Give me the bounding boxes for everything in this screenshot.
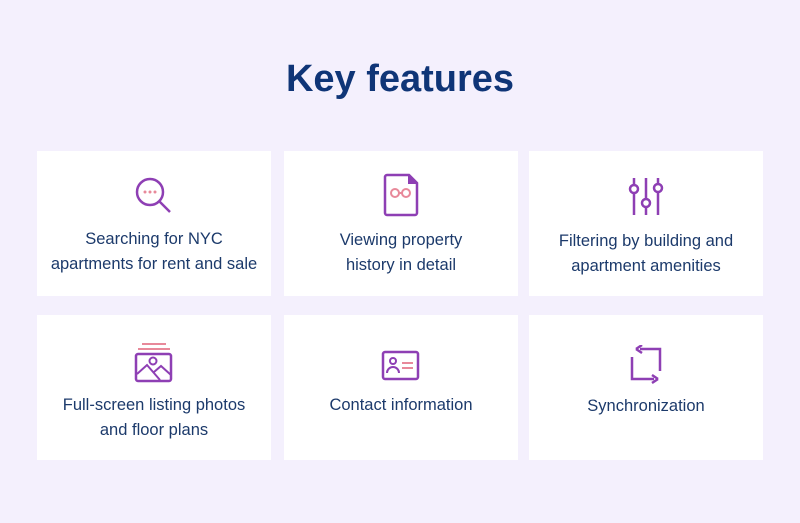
text <box>51 230 257 273</box>
icon: image stack <box>134 343 172 382</box>
title: Key features <box>286 58 514 100</box>
text: history in detail <box>346 256 456 274</box>
icon: magnifier <box>136 178 171 213</box>
text <box>559 232 733 275</box>
card: history <box>284 151 518 296</box>
icon: sliders <box>628 178 664 215</box>
card: filtering <box>529 151 763 296</box>
text: Contact information <box>329 396 473 414</box>
text: apartment amenities <box>571 257 721 275</box>
card: contact <box>284 315 518 460</box>
card: searching <box>37 151 271 296</box>
icon: id card <box>382 350 420 380</box>
text: Filtering by building and <box>559 232 733 250</box>
icon: document with glasses <box>384 174 418 216</box>
text: apartments for rent and sale <box>51 255 257 273</box>
text: Searching for NYC <box>85 230 223 248</box>
card: sync <box>529 315 763 460</box>
text: Synchronization <box>587 397 705 415</box>
text <box>63 396 245 439</box>
card: photos <box>37 315 271 460</box>
text <box>340 231 462 274</box>
text: Viewing property <box>340 231 462 249</box>
text: Full-screen listing photos <box>63 396 245 414</box>
text: and floor plans <box>100 421 208 439</box>
icon: sync arrows <box>630 345 662 384</box>
